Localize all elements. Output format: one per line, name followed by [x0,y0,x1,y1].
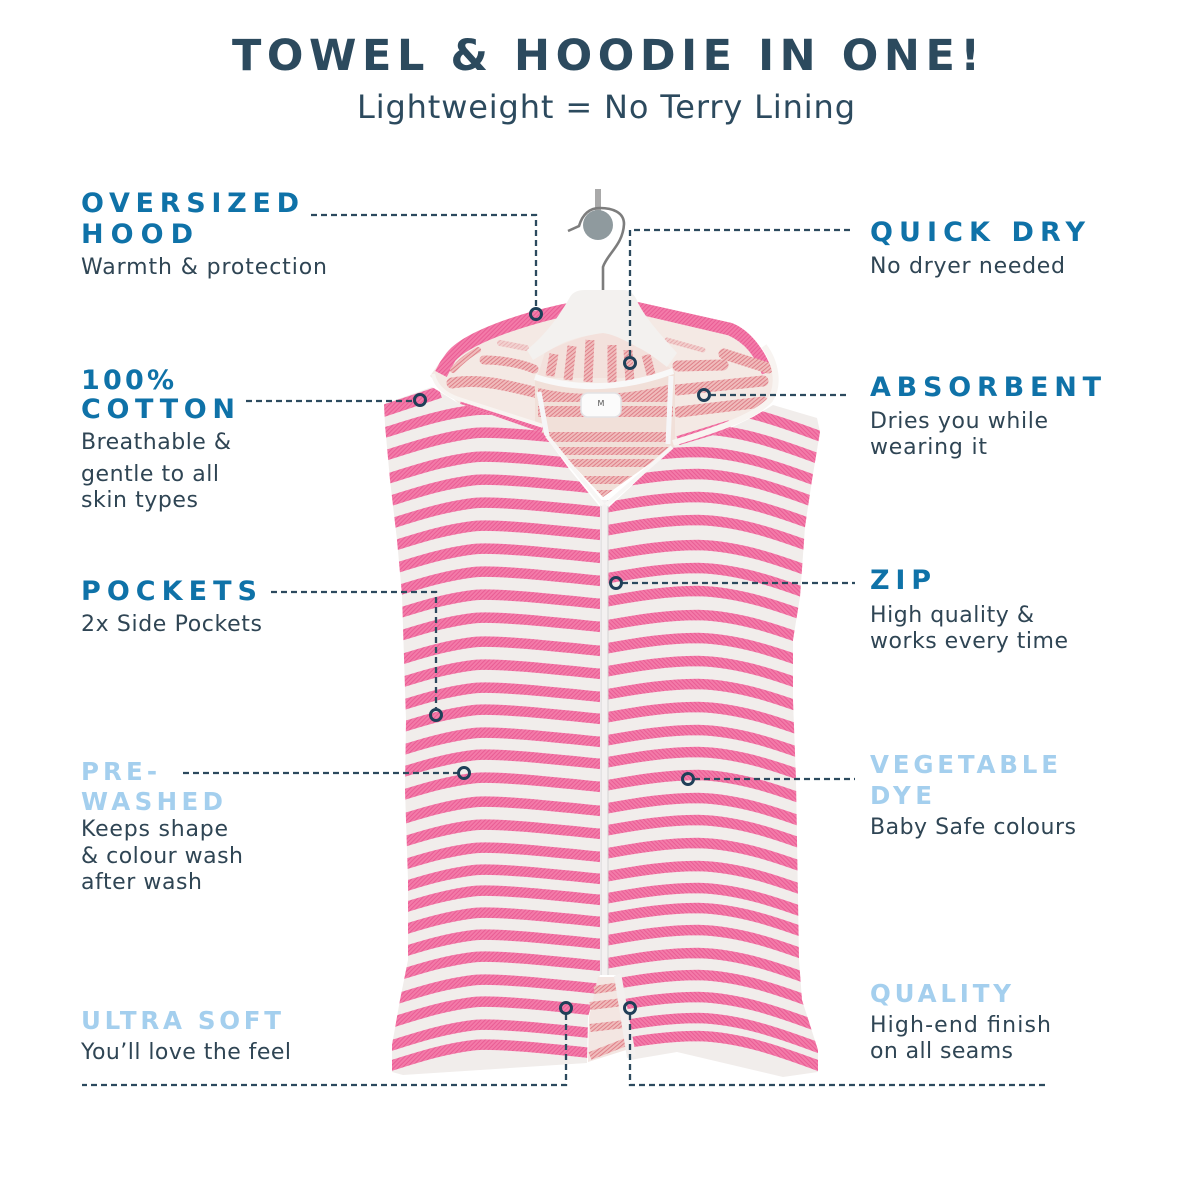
text block: quality: QUALITY [870,979,1011,1008]
text block: pre-washed [81,757,243,895]
connector: ultra soft [82,1002,572,1085]
text block: ultra soft: You’ll love the feel [80,1040,291,1065]
connector: absorbent [698,390,850,400]
text block: absorbent [870,372,1102,460]
text block: quality: High-end finish [870,1013,1051,1038]
connector: cotton [246,394,426,406]
text block: vegetable dye: DYE [870,781,932,810]
text block: zip: High quality & [870,603,1034,628]
subtitle: Lightweight = No Terry Lining [357,88,855,126]
care tag [614,973,636,1058]
hanger [527,290,677,367]
hood rim [441,307,768,374]
connector: oversized hood [311,215,542,320]
text block: absorbent: wearing it [870,435,987,460]
text block: pre-washed: PRE- [81,757,157,786]
connector: pockets [271,592,442,720]
text block: quality: on all seams [870,1039,1013,1064]
hoodie product illustration [370,189,830,1080]
text block: vegetable dye: Baby Safe colours [870,815,1076,840]
connector: zip [610,578,855,588]
text block: pre-washed: & colour wash [81,844,243,869]
connector: quick dry [624,230,850,368]
text block: oversized hood: OVERSIZED [81,188,299,219]
text block: quality [870,979,1051,1064]
hood front pink folds [460,404,730,441]
text block: zip: ZIP [870,565,931,596]
text block: ultra soft [80,1006,291,1065]
text block: quick dry: No dryer needed [870,254,1065,279]
text block: pockets: 2x Side Pockets [81,612,262,637]
wall hook [568,189,624,290]
text block: absorbent: Dries you while [870,409,1048,434]
text block: absorbent: ABSORBENT [870,372,1102,403]
text block: cotton: Breathable & [81,430,231,455]
text block: pre-washed: Keeps shape [81,817,228,842]
text block: pockets: POCKETS [81,576,257,607]
collar tape and size label: M [598,399,605,408]
text block: cotton: 100% [81,365,174,396]
text block: cotton: COTTON [81,394,235,425]
hood [430,302,776,500]
zipper [547,436,672,975]
connector: quality [624,1002,1048,1085]
collar tape and size label [535,371,673,444]
hood lapel edges [433,374,543,426]
text block: oversized hood: HOOD [81,219,193,250]
text block: oversized hood: Warmth & protection [81,255,327,280]
text block: oversized hood [81,188,327,280]
text block: vegetable dye [870,750,1076,840]
text block: pre-washed: after wash [81,870,202,895]
text block: zip [870,565,1068,654]
text block: ultra soft: ULTRA SOFT [81,1006,281,1035]
left front panel with stripes [384,387,600,1075]
text block: pockets [81,576,262,637]
title: TOWEL & HOODIE IN ONE! [232,31,980,81]
connector: vegetable dye [682,774,855,784]
text block: vegetable dye: VEGETABLE [870,750,1058,779]
connector: pre-washed [183,768,470,778]
hood lining stripes [452,340,768,412]
text block: pre-washed: WASHED [81,787,223,816]
text block: zip: works every time [870,629,1068,654]
text block: quick dry [870,217,1085,279]
text block: quick dry: QUICK DRY [870,217,1085,248]
right front panel with stripes [608,405,820,1077]
text block: cotton: gentle to all [81,462,219,487]
inner back panel visible through the slit [588,977,626,1062]
back neck [537,333,672,378]
text block: cotton [81,365,235,513]
text block: cotton: skin types [81,488,198,513]
neck interior [535,372,675,500]
